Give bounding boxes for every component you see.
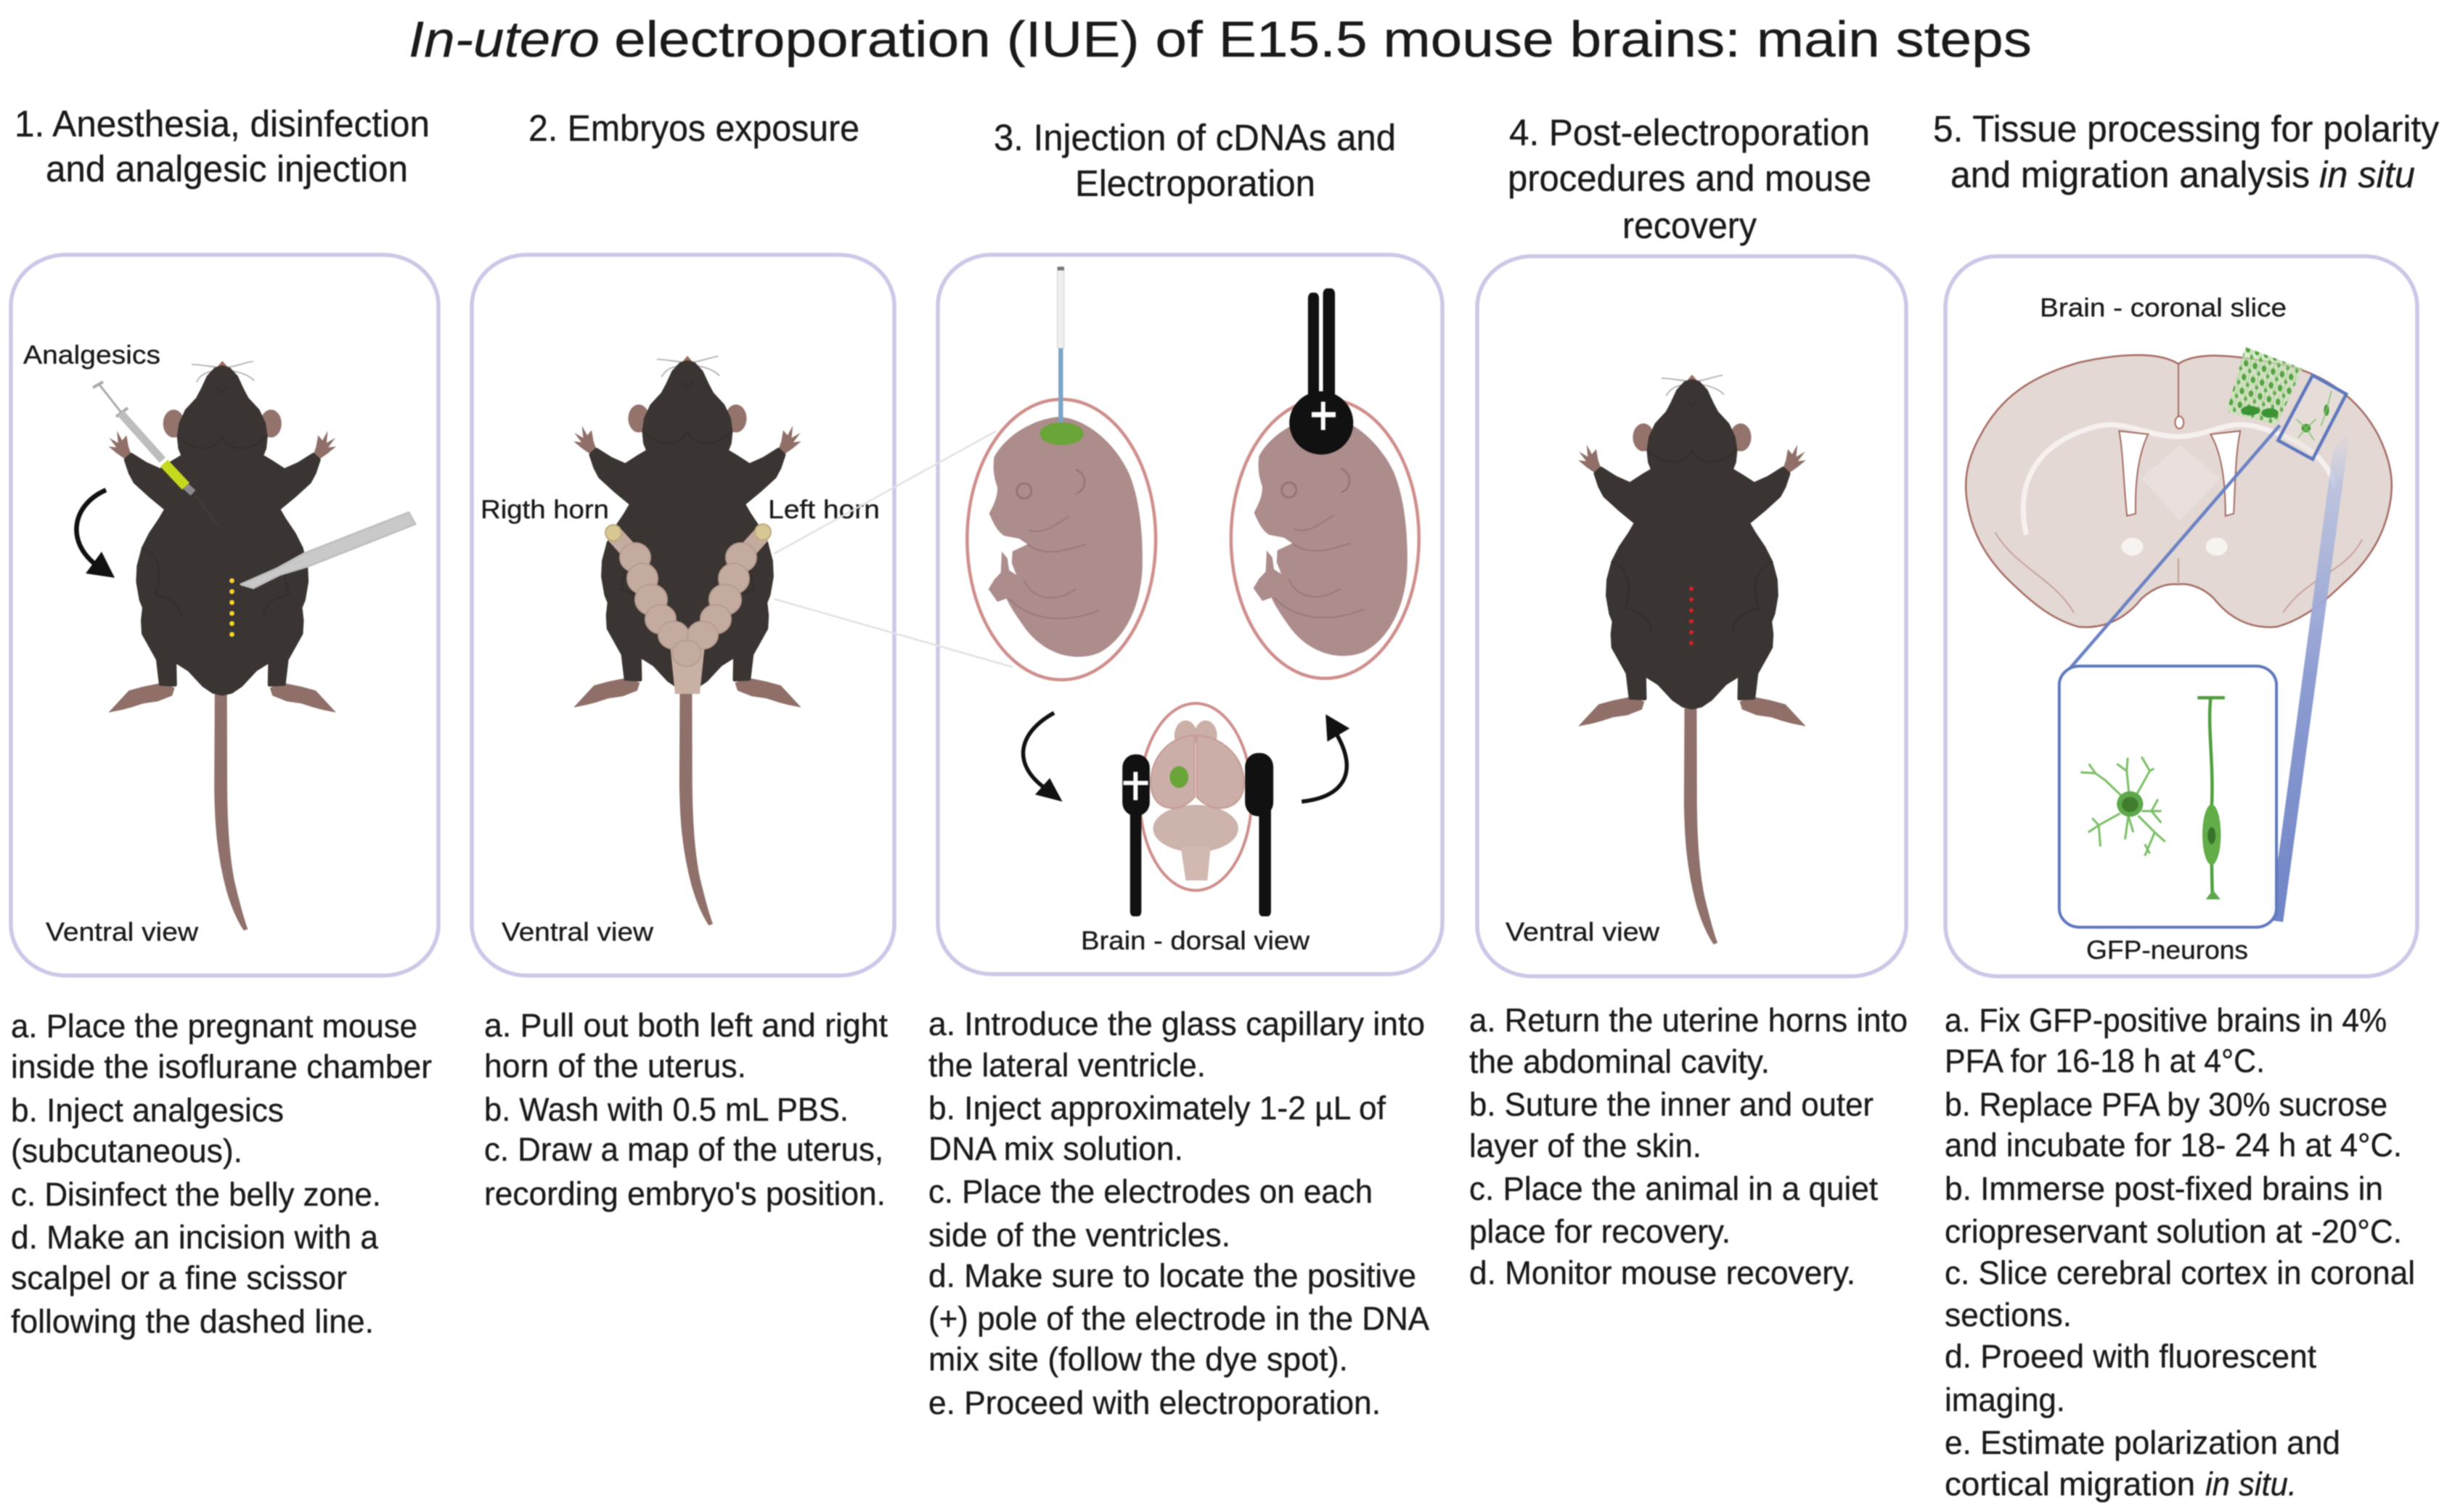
icon: syringe <box>93 382 219 527</box>
text block: step 2 instructions: horn of the uterus. <box>484 1047 746 1084</box>
heading: step 3 <box>994 117 1396 204</box>
incision dashed line <box>229 578 235 637</box>
icon: scalpel <box>241 512 415 588</box>
panel: step 4 recovery <box>1477 256 1906 976</box>
text block: step 3 instructions: (+) pole of the electrode in the DNA <box>928 1300 1429 1337</box>
heading: step 5 <box>1933 108 2439 195</box>
label: Rigth horn: Rigth horn <box>481 494 609 524</box>
label: Ventral view: Ventral view <box>46 917 199 947</box>
small neurons in zoom box <box>2296 391 2332 441</box>
text block: step 1 instructions: c. Disinfect the belly zone. <box>11 1176 381 1213</box>
brain dorsal view with electrodes <box>1122 703 1273 916</box>
text block: step 1 instructions: d. Make an incision with a <box>11 1219 379 1256</box>
text block: step 3 instructions: e. Proceed with electroporation. <box>928 1384 1381 1421</box>
text block: step 5 instructions: a. Fix GFP-positive brains in 4% <box>1945 1002 2387 1039</box>
mouse, ventral view <box>108 361 336 930</box>
text block: step 4 instructions: place for recovery. <box>1469 1213 1731 1250</box>
arrow: rotate mouse <box>76 490 115 578</box>
text block: step 3 instructions: d. Make sure to locate the positive <box>928 1257 1416 1294</box>
heading: step 5: 5. Tissue processing for polarity <box>1933 108 2439 150</box>
embryo with electrode <box>1231 288 1419 679</box>
text block: step 5 instructions: in situ. <box>2205 1466 2297 1503</box>
heading: step 4 <box>1508 112 1871 246</box>
text block: step 5 instructions: imaging. <box>1945 1381 2065 1418</box>
panel: step 5 tissue processing <box>1945 256 2417 976</box>
GFP-labelled cortical neurons <box>2226 347 2303 425</box>
heading: step 1: 1. Anesthesia, disinfection <box>15 103 430 144</box>
text block: step 4 instructions: b. Suture the inner and outer <box>1469 1086 1874 1123</box>
arrow: rotate right <box>1302 714 1349 801</box>
text block: step 1 instructions: b. Inject analgesics <box>11 1092 284 1129</box>
zoom box on cortex <box>2278 375 2346 459</box>
text block: step 4 instructions: d. Monitor mouse recovery. <box>1469 1254 1855 1291</box>
label: Brain - coronal slice: Brain - coronal slice <box>2040 293 2287 322</box>
title: In-utero <box>409 11 600 68</box>
heading: step 4: procedures and mouse <box>1508 158 1871 199</box>
heading: step 3: Electroporation <box>1075 163 1315 204</box>
multipolar neuron <box>2080 757 2165 856</box>
label: Analgesics: Analgesics <box>23 340 160 369</box>
text block: step 4 instructions: the abdominal cavity. <box>1469 1043 1770 1080</box>
text block: step 4 instructions: a. Return the uterine horns into <box>1469 1002 1908 1039</box>
heading: step 3: 3. Injection of cDNAs and <box>994 117 1396 158</box>
label: Ventral view: Ventral view <box>502 917 654 947</box>
text block: step 3 instructions: the lateral ventricle. <box>928 1047 1206 1084</box>
heading: step 5: and migration analysis <box>1950 154 2310 195</box>
heading: step 4: 4. Post-electroporation <box>1509 112 1870 153</box>
brain coronal slice <box>1966 355 2392 627</box>
zoom connector left <box>2061 425 2280 679</box>
text block: step 2 instructions <box>484 1007 888 1212</box>
label: GFP-neurons: GFP-neurons <box>2086 935 2248 965</box>
text block: step 3 instructions: c. Place the electrodes on each <box>928 1173 1373 1210</box>
text block: step 1 instructions: inside the isoflurane chamber <box>11 1048 432 1085</box>
text block: step 5 instructions: e. Estimate polarization and <box>1945 1424 2340 1461</box>
text block: step 5 instructions: d. Proeed with fluorescent <box>1945 1338 2316 1375</box>
zoom lines from uterus to embryo <box>774 431 1013 667</box>
text block: step 4 instructions: c. Place the animal in a quiet <box>1469 1170 1878 1207</box>
text block: step 5 instructions <box>1945 1002 2415 1503</box>
text block: step 1 instructions: scalpel or a fine scissor <box>11 1259 347 1296</box>
text block: step 5 instructions: b. Replace PFA by 30% sucrose <box>1945 1086 2387 1123</box>
text block: step 5 instructions: c. Slice cerebral cortex in coronal <box>1945 1254 2415 1291</box>
mouse, ventral view <box>573 356 801 925</box>
heading: step 1 <box>15 103 430 189</box>
text block: step 5 instructions: and incubate for 18- 24 h at 4°C. <box>1945 1127 2402 1164</box>
label: Brain - dorsal view: Brain - dorsal view <box>1081 925 1310 955</box>
text block: step 4 instructions <box>1469 1002 1908 1291</box>
text block: step 1 instructions: a. Place the pregnant mouse <box>11 1008 417 1045</box>
text block: step 4 instructions: layer of the skin. <box>1469 1127 1702 1164</box>
text block: step 2 instructions: b. Wash with 0.5 mL PBS. <box>484 1091 849 1128</box>
heading: step 5: in situ <box>2319 154 2415 195</box>
text block: step 3 instructions: DNA mix solution. <box>928 1130 1183 1167</box>
heading: step 2: 2. Embryos exposure <box>528 107 859 149</box>
text block: step 3 instructions: side of the ventricles. <box>928 1217 1230 1254</box>
zoom connector right <box>2270 426 2350 922</box>
text block: step 1 instructions: (subcutaneous). <box>11 1132 242 1169</box>
text block: step 5 instructions: b. Immerse post-fixed brains in <box>1945 1170 2383 1207</box>
text block: step 5 instructions: criopreservant solution at -20°C. <box>1945 1213 2402 1250</box>
heading: step 4: recovery <box>1622 205 1757 246</box>
text block: step 3 instructions: a. Introduce the glass capillary into <box>928 1005 1425 1042</box>
label: Left horn: Left horn <box>768 494 880 524</box>
text block: step 3 instructions: mix site (follow the dye spot). <box>928 1341 1348 1378</box>
inset box: GFP neurons <box>2059 666 2276 927</box>
uterine horns <box>605 524 771 694</box>
arrow: rotate left <box>1024 713 1063 801</box>
text block: step 3 instructions <box>928 1005 1429 1421</box>
title: electroporation (IUE) of E15.5 mouse brains: main steps <box>614 11 2032 68</box>
bipolar neuron <box>2197 698 2225 899</box>
panel: step 2 embryos exposure <box>472 255 894 976</box>
text block: step 3 instructions: b. Inject approximately 1-2 µL of <box>928 1090 1386 1127</box>
panel: step 3 injection and electroporation <box>938 255 1442 974</box>
embryo with capillary <box>967 266 1156 680</box>
text block: step 5 instructions: sections. <box>1945 1296 2072 1333</box>
heading: step 1: and analgesic injection <box>46 148 408 189</box>
label: Ventral view: Ventral view <box>1506 917 1660 947</box>
sutures <box>1689 587 1694 645</box>
text block: step 5 instructions: PFA for 16-18 h at 4°C. <box>1945 1042 2265 1079</box>
text block: step 1 instructions <box>11 1008 432 1340</box>
text block: step 2 instructions: c. Draw a map of the uterus, <box>484 1131 883 1168</box>
text block: step 2 instructions: a. Pull out both left and right <box>484 1007 888 1044</box>
panel: step 1 anesthesia <box>11 255 438 976</box>
text block: step 1 instructions: following the dashed line. <box>11 1303 374 1340</box>
mouse, ventral view <box>1578 375 1806 944</box>
text block: step 5 instructions: cortical migration <box>1945 1466 2195 1503</box>
text block: step 2 instructions: recording embryo's position. <box>484 1175 886 1212</box>
